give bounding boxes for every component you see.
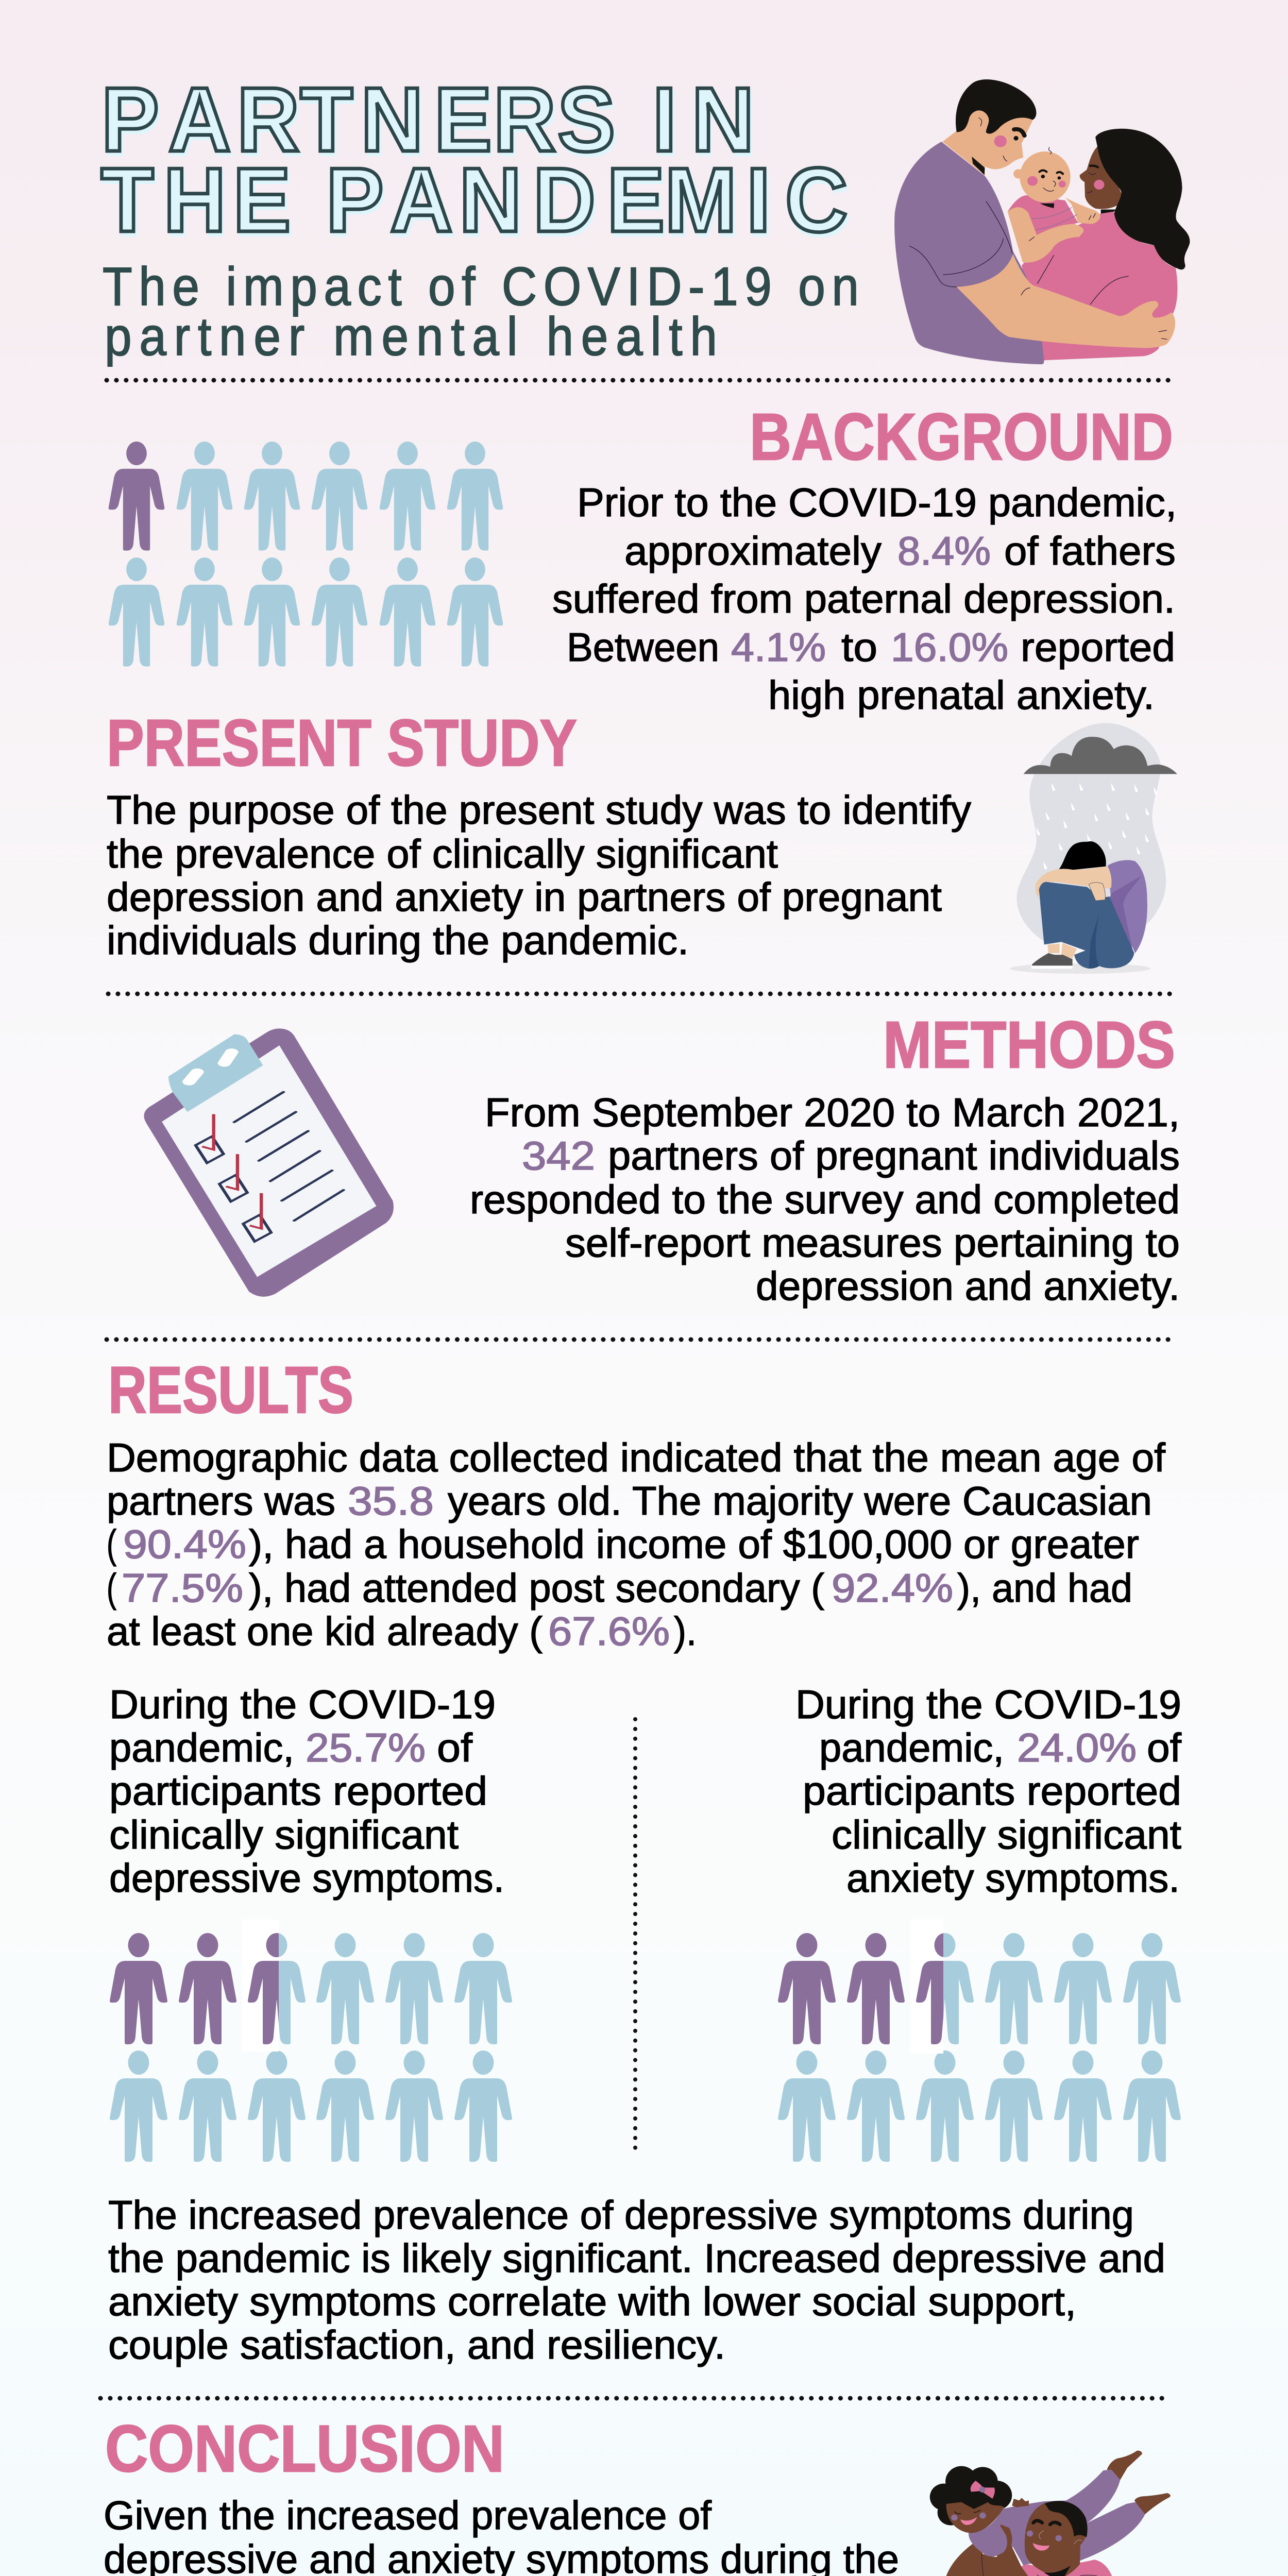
text block: anxiety result: participants reported bbox=[803, 1768, 1181, 1814]
divider bbox=[108, 991, 1176, 996]
text block: anxiety result: 24.0% bbox=[1017, 1725, 1137, 1770]
title: PARTNERS IN bbox=[104, 72, 756, 174]
text block: depression result: pandemic, bbox=[109, 1725, 294, 1770]
text block: demographics bbox=[107, 1435, 1165, 1654]
text block: demographics: at least one kid already ( bbox=[107, 1608, 543, 1654]
text block: anxiety result: anxiety symptoms. bbox=[846, 1855, 1180, 1901]
heading: results: RESULTS bbox=[108, 1353, 353, 1427]
text block: background: 16.0% bbox=[891, 624, 1008, 670]
subtitle: The impact of COVID-19 on bbox=[103, 257, 859, 317]
text block: background: to bbox=[841, 624, 877, 670]
text block: background: reported bbox=[1021, 624, 1175, 670]
text block: depression result bbox=[109, 1682, 504, 1901]
vertical divider bbox=[633, 1719, 637, 2157]
text block: demographics: Demographic data collected indicated that the mean age of bbox=[107, 1435, 1165, 1480]
text block: methods bbox=[470, 1090, 1180, 1309]
divider bbox=[100, 2396, 1168, 2401]
illustration: clipboard checklist bbox=[144, 1028, 394, 1297]
text block: anxiety result: pandemic, bbox=[819, 1725, 1004, 1770]
text block: demographics: ), had attended post secondary ( bbox=[249, 1565, 824, 1611]
text block: background: 8.4% bbox=[897, 528, 991, 573]
text block: depression result: 25.7% bbox=[306, 1725, 426, 1770]
text block: results summary: couple satisfaction, and resiliency. bbox=[108, 2322, 725, 2367]
text block: conclusion: Given the increased prevalence of bbox=[104, 2493, 711, 2538]
pictogram: anxiety 24.0% bbox=[778, 1920, 1181, 2162]
text block: demographics: 90.4% bbox=[123, 1521, 246, 1567]
text block: demographics: years old. The majority were Caucasian bbox=[448, 1478, 1152, 1523]
text block: depression result: participants reported bbox=[109, 1768, 487, 1814]
text block: demographics: partners was bbox=[107, 1478, 335, 1523]
title bbox=[101, 69, 850, 255]
text block: depression result: During the COVID-19 bbox=[109, 1682, 496, 1727]
text block: demographics: 67.6% bbox=[548, 1608, 670, 1654]
text block: methods: depression and anxiety. bbox=[756, 1263, 1180, 1309]
text block: methods: responded to the survey and completed bbox=[470, 1177, 1180, 1222]
pictogram: background 1 in 12 bbox=[109, 442, 503, 667]
subtitle bbox=[103, 257, 859, 367]
divider bbox=[107, 1337, 1175, 1342]
text block: methods: From September 2020 to March 2021, bbox=[485, 1090, 1180, 1135]
divider bbox=[107, 378, 1176, 382]
text block: present study: The purpose of the present study was to identify bbox=[107, 787, 971, 833]
heading: background: BACKGROUND bbox=[750, 400, 1173, 474]
text block: anxiety result: of bbox=[1147, 1725, 1181, 1770]
text block: demographics: ). bbox=[674, 1608, 697, 1654]
text block: demographics: ), and had bbox=[957, 1565, 1132, 1611]
text block: demographics: 92.4% bbox=[832, 1565, 953, 1611]
text block: background: Between bbox=[567, 624, 719, 670]
text block: results summary: anxiety symptoms correlate with lower social support, bbox=[108, 2279, 1076, 2324]
subtitle: partner mental health bbox=[105, 307, 717, 367]
text block: background: 4.1% bbox=[731, 624, 826, 670]
title: PARTNERS IN bbox=[101, 69, 754, 171]
text block: background: suffered from paternal depression. bbox=[552, 576, 1175, 621]
text block: present study: depression and anxiety in partners of pregnant bbox=[107, 874, 942, 920]
text block: background bbox=[552, 480, 1177, 718]
text block: demographics: 35.8 bbox=[348, 1478, 434, 1523]
heading: present study: PRESENT STUDY bbox=[107, 706, 577, 780]
text block: present study: the prevalence of clinically significant bbox=[107, 831, 778, 876]
text block: demographics: ), had a household income of $100,000 or greater bbox=[249, 1521, 1139, 1567]
text block: demographics: ( bbox=[107, 1565, 116, 1611]
title: THE PANDEMIC bbox=[103, 152, 850, 255]
text block: present study: individuals during the pandemic. bbox=[107, 918, 689, 963]
text block: anxiety result bbox=[795, 1682, 1181, 1901]
text block: demographics: 77.5% bbox=[122, 1565, 243, 1611]
text block: methods: partners of pregnant individuals bbox=[608, 1133, 1180, 1178]
title: THE PANDEMIC bbox=[101, 149, 848, 251]
text block: anxiety result: During the COVID-19 bbox=[795, 1682, 1181, 1727]
text block: results summary bbox=[108, 2192, 1165, 2367]
illustration: couple with baby bbox=[894, 79, 1190, 364]
text block: methods: 342 bbox=[522, 1133, 595, 1178]
text block: conclusion bbox=[104, 2493, 899, 2576]
text block: results summary: The increased prevalence of depressive symptoms during bbox=[108, 2192, 1134, 2238]
text block: demographics: ( bbox=[107, 1521, 116, 1567]
text block: background: approximately bbox=[624, 528, 882, 573]
pictogram: depression 25.7% bbox=[110, 1920, 512, 2162]
text block: depression result: depressive symptoms. bbox=[109, 1855, 504, 1901]
text block: methods: self-report measures pertaining to bbox=[565, 1220, 1180, 1265]
text block: anxiety result: clinically significant bbox=[832, 1812, 1181, 1857]
text block: depression result: clinically significant bbox=[109, 1812, 459, 1857]
heading: conclusion: CONCLUSION bbox=[105, 2412, 504, 2486]
text block: background: Prior to the COVID-19 pandemic, bbox=[577, 480, 1177, 525]
illustration: father lifting daughter bbox=[930, 2451, 1171, 2576]
text block: present study bbox=[107, 787, 971, 963]
text block: results summary: the pandemic is likely significant. Increased depressive and bbox=[108, 2235, 1165, 2281]
text block: depression result: of bbox=[437, 1725, 472, 1770]
text block: background: high prenatal anxiety. bbox=[768, 672, 1155, 718]
heading: methods: METHODS bbox=[883, 1008, 1175, 1082]
text block: background: of fathers bbox=[1004, 528, 1176, 573]
illustration: person under rain cloud bbox=[1010, 723, 1177, 974]
